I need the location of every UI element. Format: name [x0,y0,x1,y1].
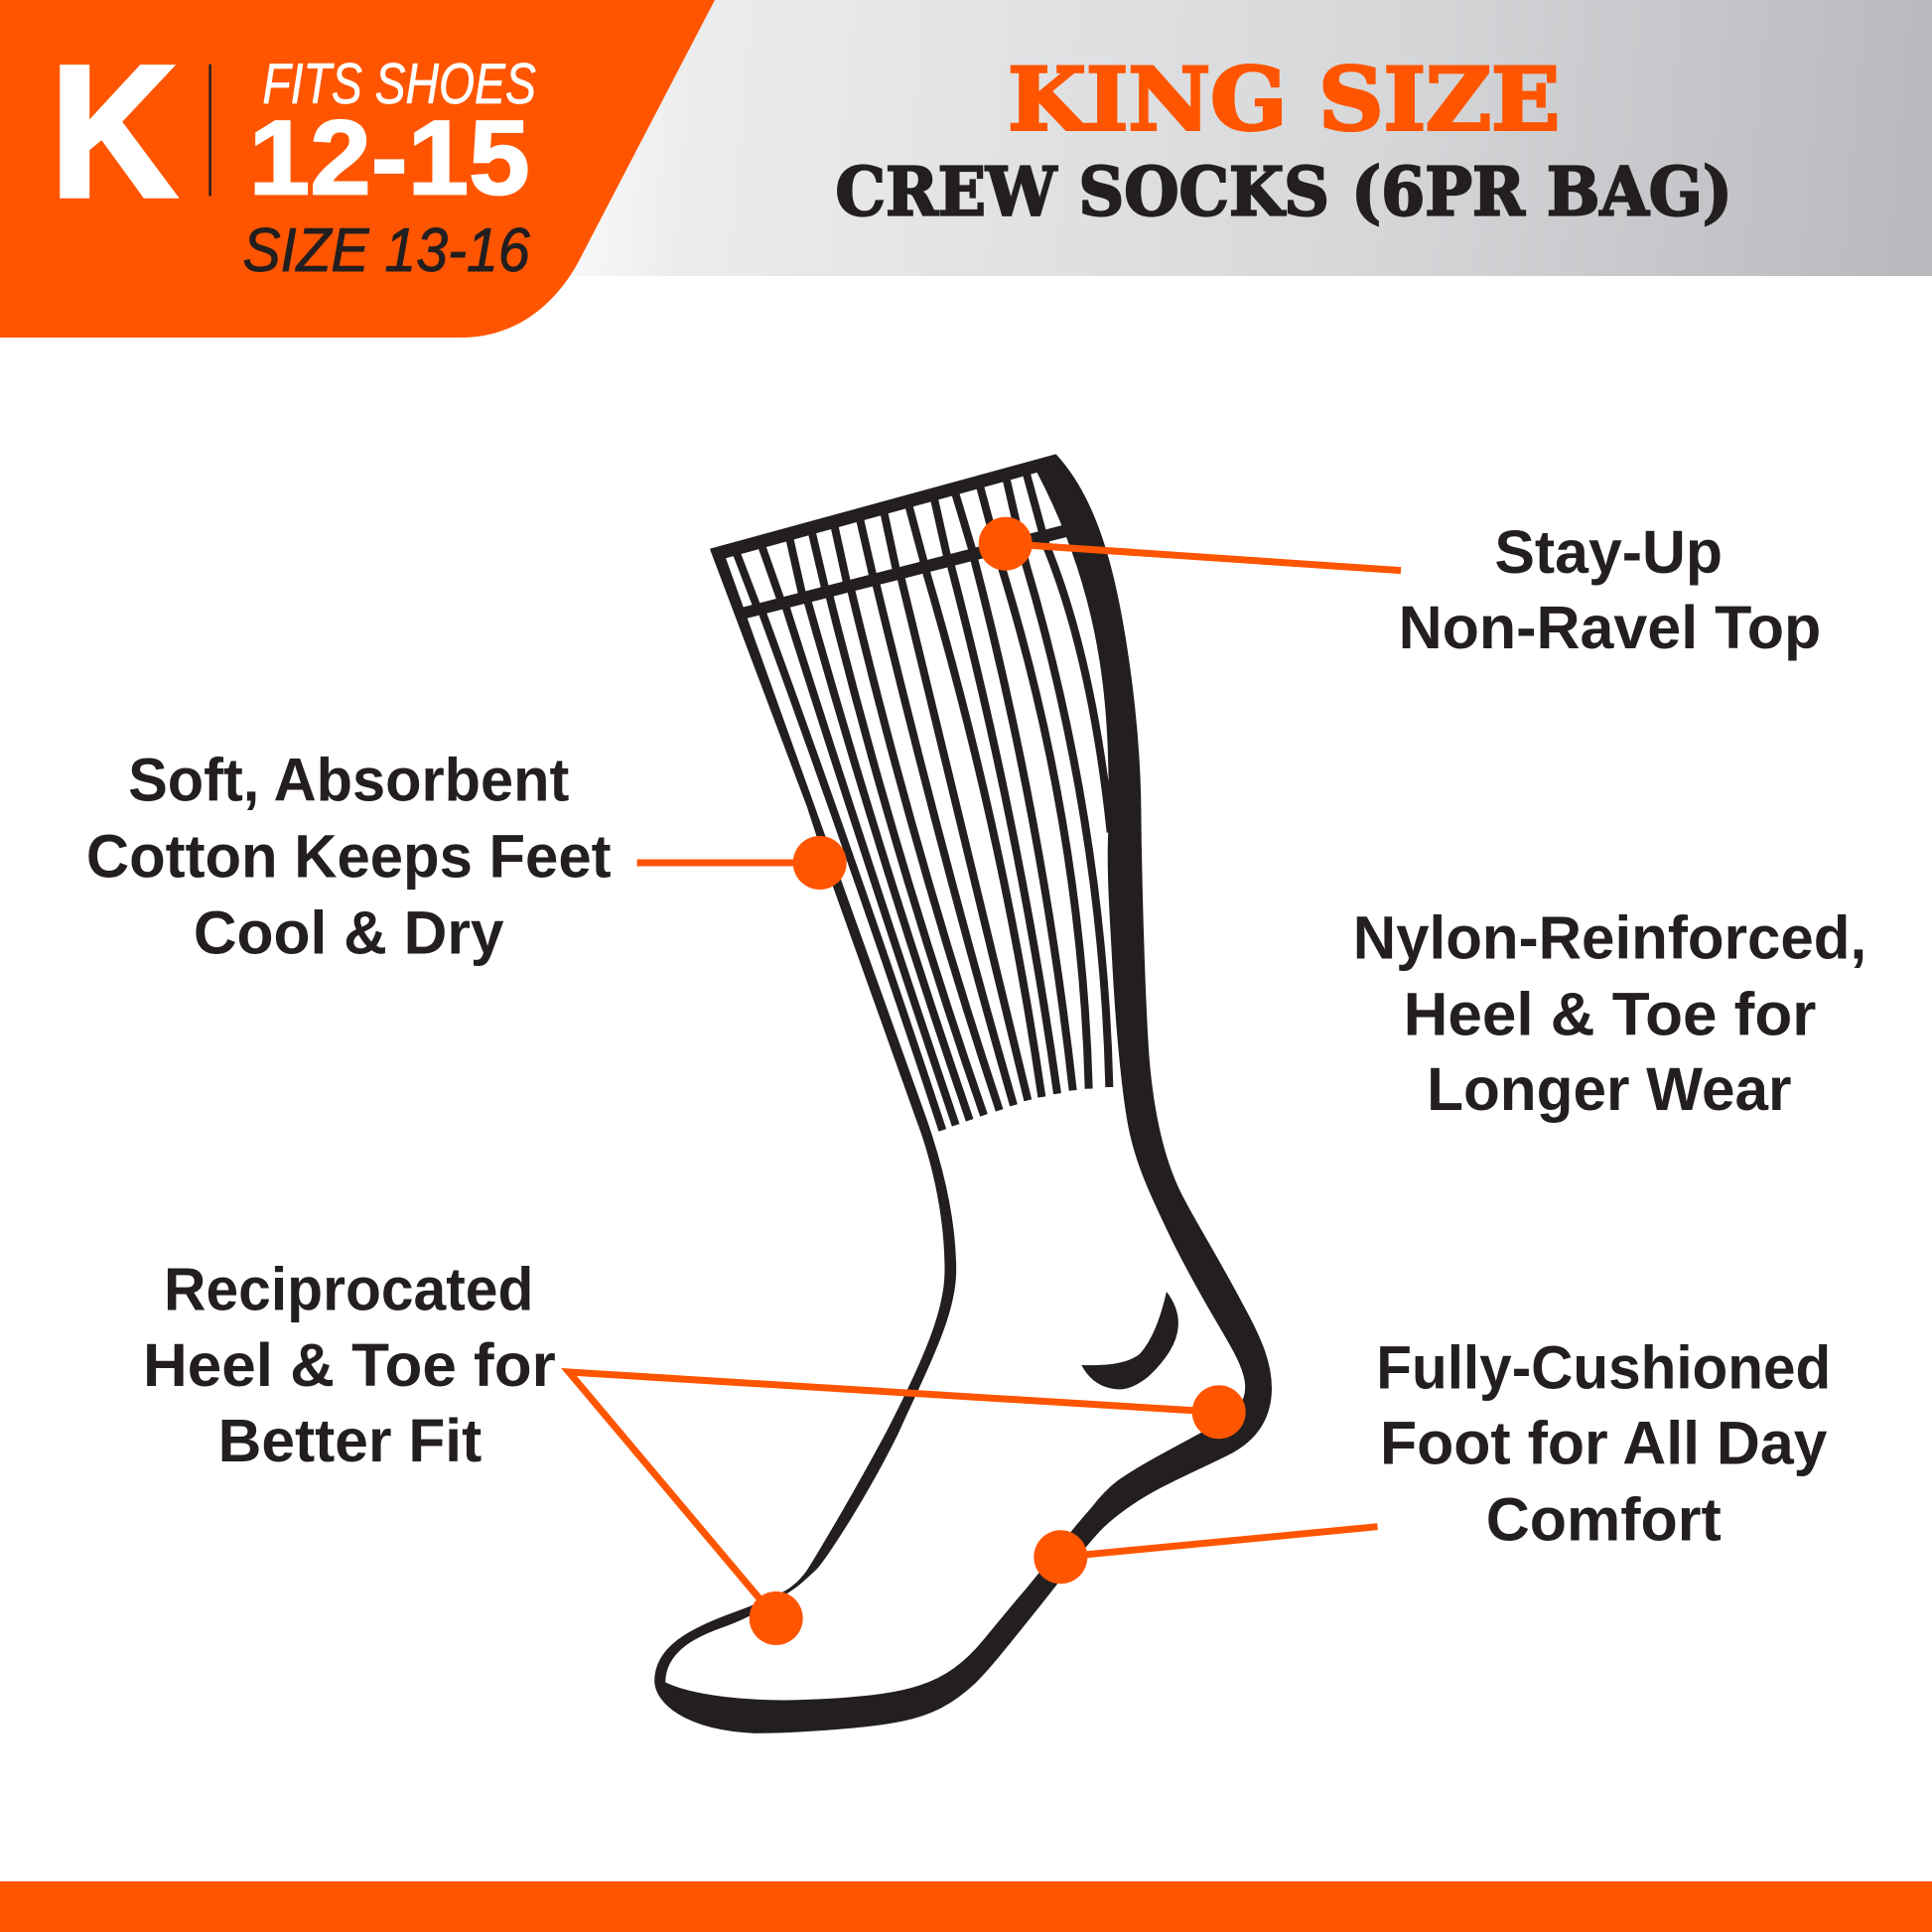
all text [51,26,1866,1553]
label: cushioned: Fully-Cushioned [1376,1334,1831,1402]
callout: heel and toe pointers [569,1372,1246,1645]
shoe size range: 12-15 [249,97,530,216]
header gradient band [0,0,1932,276]
label: nylon reinforced: Heel & Toe for [1404,980,1816,1047]
cuff ribs and leg ribs [737,472,1111,1130]
divider [208,65,211,196]
label: nylon reinforced [1353,904,1866,1123]
cuff cross band [742,525,1069,619]
sock outline [655,455,1271,1732]
bottom orange bar [0,1881,1932,1932]
label: stay-up top: Non-Ravel Top [1399,594,1821,661]
sock illustration [655,455,1271,1732]
label: cotton: Cotton Keeps Feet [86,823,612,891]
label: cushioned: Foot for All Day [1380,1409,1828,1476]
label: stay-up top: Stay-Up [1494,518,1723,586]
label: reciprocated [143,1255,556,1474]
label: reciprocated: Heel & Toe for [143,1331,556,1399]
label: reciprocated: Better Fit [218,1407,482,1474]
callout: stay-up top pointer [979,517,1401,571]
label: cotton: Soft, Absorbent [128,747,569,814]
label: reciprocated: Reciprocated [164,1255,533,1322]
label: stay-up top [1399,518,1821,661]
title: KING SIZE [1008,49,1560,150]
callout: cushioned foot pointer [1034,1527,1378,1584]
orange size badge [0,0,715,338]
callout: cotton pointer [637,836,847,890]
heel crease mark [1081,1292,1178,1389]
size letter K: K [51,26,176,235]
label: cotton: Cool & Dry [194,899,504,967]
label: nylon reinforced: Nylon-Reinforced, [1353,904,1866,972]
label: nylon reinforced: Longer Wear [1427,1055,1792,1123]
label: cotton [86,747,612,967]
fits shoes label: FITS SHOES [262,53,536,116]
label: cushioned [1376,1334,1831,1553]
label: cushioned: Comfort [1486,1485,1722,1553]
subtitle: CREW SOCKS (6PR BAG) [835,153,1732,231]
sock size: SIZE 13-16 [242,216,530,285]
